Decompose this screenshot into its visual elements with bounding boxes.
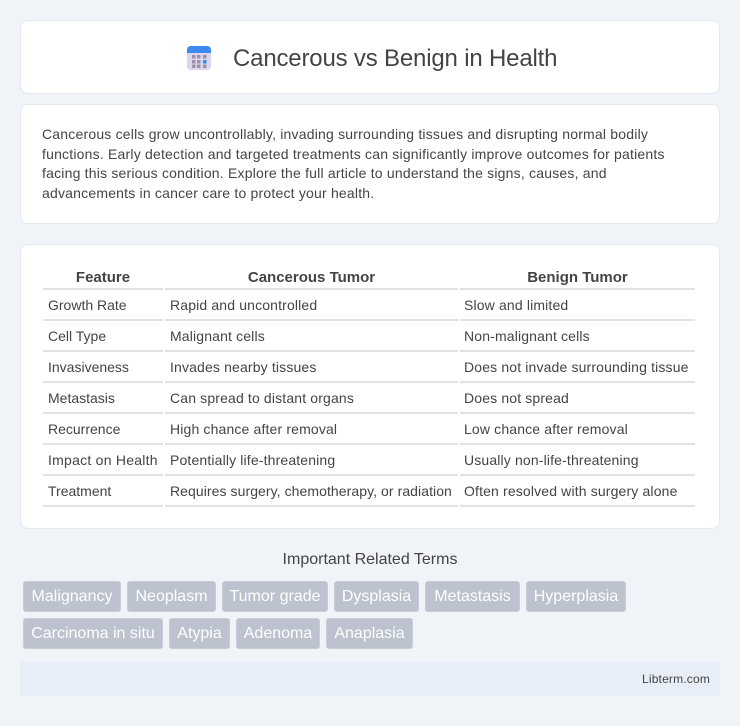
intro text panel [20,104,720,224]
comparison table: Non-malignant cells [464,328,590,344]
comparison table: Metastasis [48,390,115,406]
related terms tags [23,581,626,649]
comparison table: Usually non-life-threatening [464,452,639,468]
related terms tags: Tumor grade [230,588,320,605]
comparison table: Invasiveness [48,359,129,375]
header panel [20,20,720,94]
icon: calendar grid [187,46,211,70]
related terms tags: Adenoma [244,625,312,642]
comparison table: Recurrence [48,421,120,437]
intro paragraph: facing this serious condition. Explore the full article to understand the signs, causes, and [42,165,607,181]
related terms tags: Dysplasia [342,588,411,605]
comparison table: Treatment [48,483,111,499]
related terms tags: Anaplasia [334,625,405,642]
related terms tags: Neoplasm [135,588,208,605]
comparison table: Feature [76,269,130,286]
comparison table: Often resolved with surgery alone [464,483,678,499]
comparison table: Invades nearby tissues [170,359,316,375]
comparison table: Growth Rate [48,297,127,313]
intro paragraph: advancements in cancer care to protect your health. [42,184,374,200]
related terms tags: Metastasis [434,588,511,605]
intro paragraph: Cancerous cells grow uncontrollably, invading surrounding tissues and disrupting normal bodily [42,126,648,142]
comparison table: Requires surgery, chemotherapy, or radiation [170,483,452,499]
related terms tags: Malignancy [32,588,112,605]
related terms tags: Hyperplasia [534,588,618,605]
comparison table: Malignant cells [170,328,265,344]
footer bar [20,662,720,696]
intro paragraph: functions. Early detection and targeted treatments can significantly improve outcomes for patients [42,146,665,162]
comparison table: Slow and limited [464,297,568,313]
related terms tags: Atypia [177,625,222,642]
comparison table: Cell Type [48,328,106,344]
comparison table panel [20,244,720,529]
comparison table: Rapid and uncontrolled [170,297,317,313]
comparison table: Impact on Health [48,452,158,468]
comparison table: Low chance after removal [464,421,628,437]
related terms tags: Carcinoma in situ [31,625,155,642]
comparison table: Does not invade surrounding tissue [464,359,689,375]
comparison table: Cancerous Tumor [248,269,375,286]
comparison table: Does not spread [464,390,569,406]
comparison table: Potentially life-threatening [170,452,335,468]
comparison table: Can spread to distant organs [170,390,354,406]
related terms heading: Important Related Terms [283,551,457,568]
footer credit: Libterm.com [642,672,710,686]
comparison table: High chance after removal [170,421,337,437]
intro paragraph [42,126,665,201]
comparison table [43,269,695,507]
comparison table: Benign Tumor [527,269,628,286]
title: Cancerous vs Benign in Health [233,45,557,72]
